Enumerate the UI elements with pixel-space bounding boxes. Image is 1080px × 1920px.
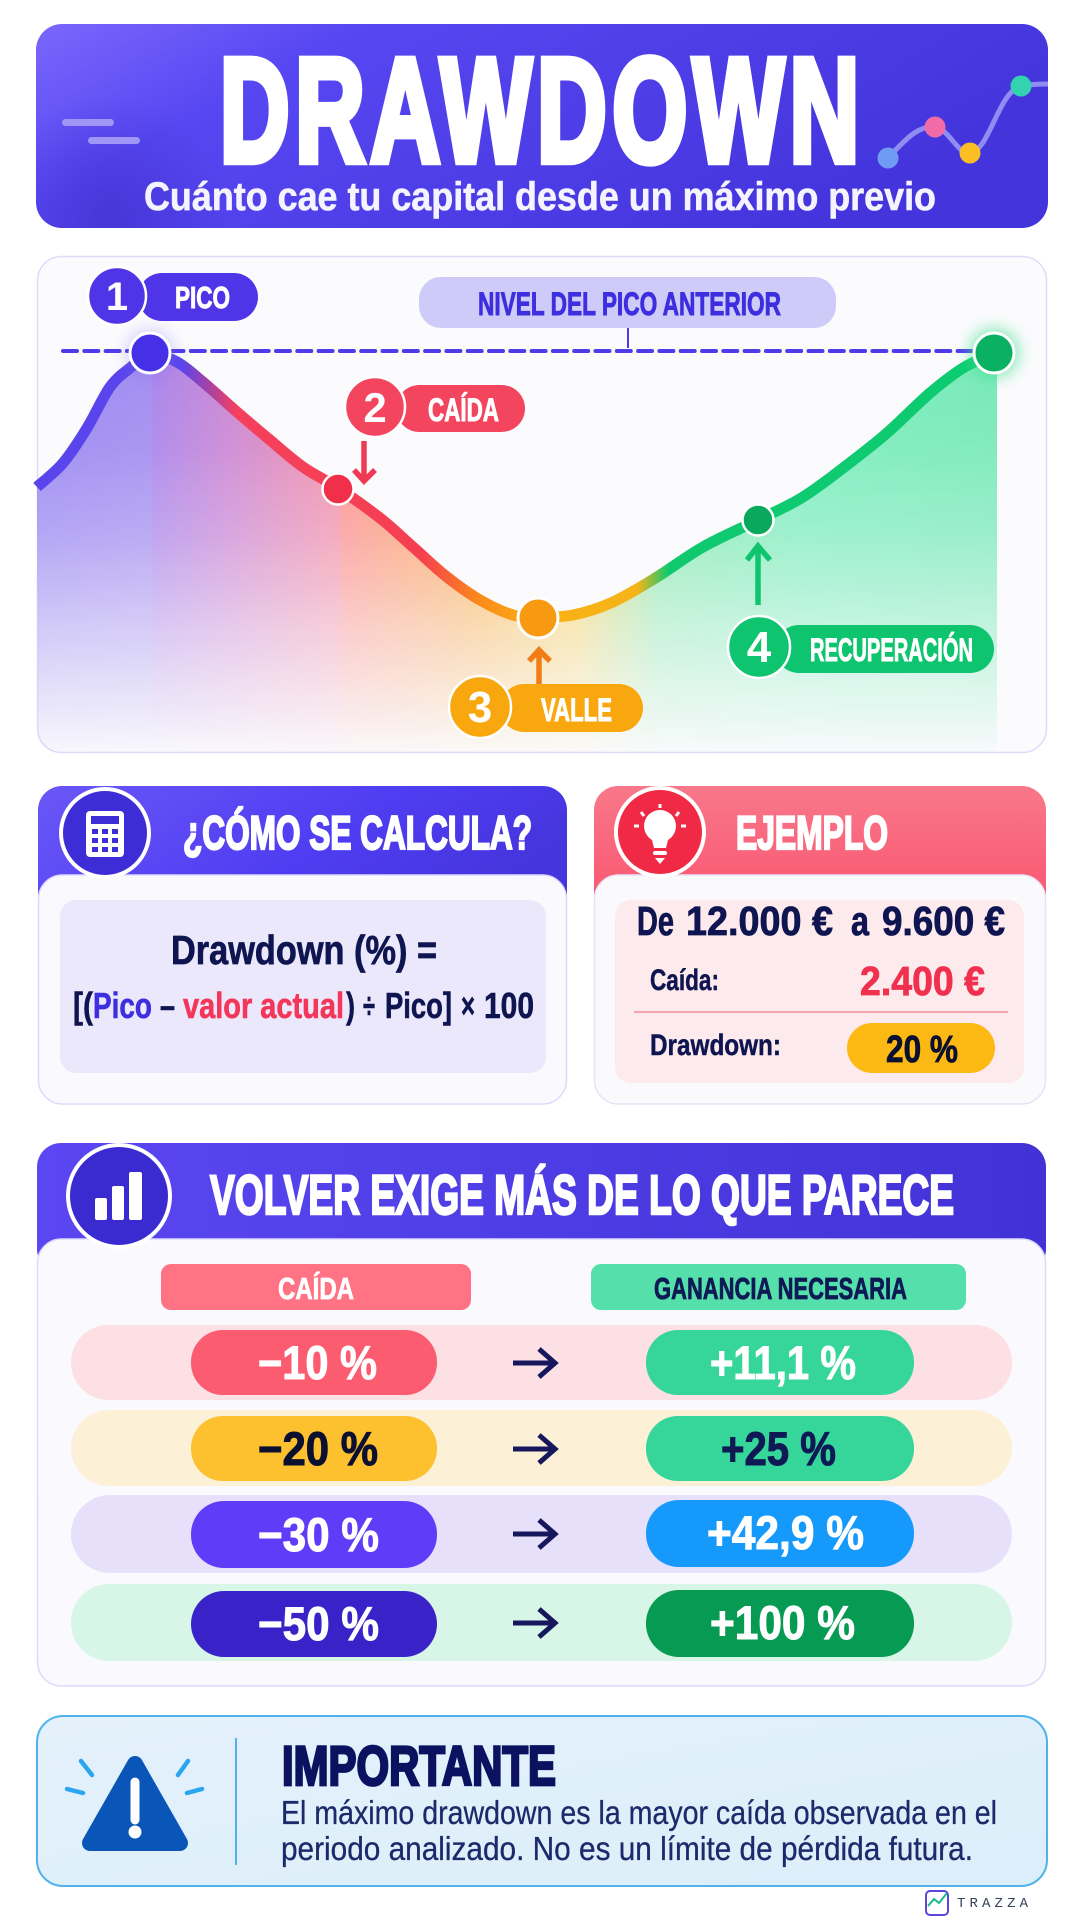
- marker 1: pico: [88, 267, 258, 377]
- area under curve: [37, 353, 997, 752]
- row: -30%: −30 %: [258, 1508, 379, 1561]
- row: -10%: +11,1 %: [710, 1336, 856, 1389]
- marker 4: recuperacion: RECUPERACIÓN: [810, 632, 973, 668]
- peak level dashed line: [63, 349, 981, 353]
- row: -50%: −50 %: [258, 1597, 379, 1650]
- row: -30%: +42,9 %: [707, 1506, 864, 1559]
- example box: 12.000 €: [686, 898, 833, 944]
- column header: caida: [161, 1264, 471, 1310]
- row: -30%: [71, 1495, 1012, 1573]
- row: -10%: −10 %: [258, 1336, 377, 1389]
- example box: Caída:: [650, 964, 719, 997]
- example box: Drawdown:: [650, 1029, 781, 1062]
- marker 1: pico: 1: [106, 275, 128, 319]
- example box: a: [851, 898, 870, 944]
- body text: [281, 1794, 997, 1867]
- example box: 2.400 €: [860, 958, 985, 1004]
- row: -50%: [71, 1584, 1012, 1661]
- subtitle: Cuánto cae tu capital desde un máximo previo: [144, 175, 936, 219]
- column header: caida: CAÍDA: [278, 1271, 354, 1306]
- formula box: ÷: [363, 985, 375, 1026]
- panel: example: [594, 786, 1046, 1104]
- marker 2: caida: 2: [363, 384, 387, 431]
- formula box: Pico]: [385, 985, 452, 1026]
- marker 3: valle: [449, 598, 643, 738]
- panel: how it is calculated: [38, 786, 567, 1104]
- marker 3: valle: 3: [468, 683, 492, 732]
- icon: calculator: [61, 789, 149, 877]
- icon: light bulb: [616, 788, 704, 876]
- formula box: Pico: [93, 985, 152, 1026]
- example box: 20 %: [886, 1029, 958, 1071]
- formula box: [(: [73, 985, 93, 1026]
- marker 2: caida: [322, 377, 525, 504]
- marker 4: recuperacion: 4: [747, 623, 772, 672]
- brand logo: [926, 1891, 1029, 1915]
- formula box: ): [346, 985, 355, 1026]
- marker 1: pico: PICO: [175, 280, 230, 315]
- body text: periodo analizado. No es un límite de pérdida futura.: [281, 1830, 973, 1867]
- icon: bar chart: [68, 1145, 170, 1247]
- example box: De: [637, 898, 674, 944]
- marker 2: caida: CAÍDA: [428, 392, 499, 428]
- mini line chart icon: [878, 76, 1048, 168]
- row: -20%: +25 %: [721, 1422, 836, 1475]
- example box: 9.600 €: [882, 898, 1005, 944]
- heading: IMPORTANTE: [282, 1734, 556, 1797]
- header banner: [36, 24, 1048, 228]
- marker 4: recuperacion: [728, 504, 994, 678]
- decorative dashes icon: [62, 119, 140, 144]
- previous peak level label: NIVEL DEL PICO ANTERIOR: [478, 286, 781, 322]
- previous peak level label: [419, 277, 836, 348]
- example box: [615, 898, 1024, 1083]
- column header: ganancia necesaria: GANANCIA NECESARIA: [654, 1271, 907, 1306]
- row: -50%: +100 %: [710, 1596, 855, 1649]
- panel: drawdown chart: [37, 256, 1046, 752]
- row: -20%: [71, 1410, 1012, 1486]
- recovered peak dot: [970, 329, 1018, 377]
- marker 3: valle: VALLE: [541, 692, 612, 728]
- panel: recovery table: [37, 1143, 1046, 1686]
- brand logo: TRAZZA: [957, 1896, 1029, 1912]
- formula box: Drawdown (%) =: [171, 927, 437, 973]
- formula box: 100: [484, 985, 534, 1026]
- formula box: [60, 900, 546, 1073]
- heading: EJEMPLO: [736, 806, 888, 859]
- formula box: ×: [461, 985, 475, 1026]
- drawdown curve: [37, 353, 995, 617]
- heading: ¿CÓMO SE CALCULA?: [183, 806, 532, 859]
- formula box: valor actual: [183, 985, 344, 1026]
- row: -10%: [71, 1325, 1012, 1400]
- column header: ganancia necesaria: [591, 1264, 966, 1310]
- icon: warning triangle: [67, 1761, 202, 1843]
- panel: important note: [37, 1716, 1047, 1886]
- row: -20%: −20 %: [258, 1422, 378, 1475]
- formula box: –: [160, 985, 175, 1026]
